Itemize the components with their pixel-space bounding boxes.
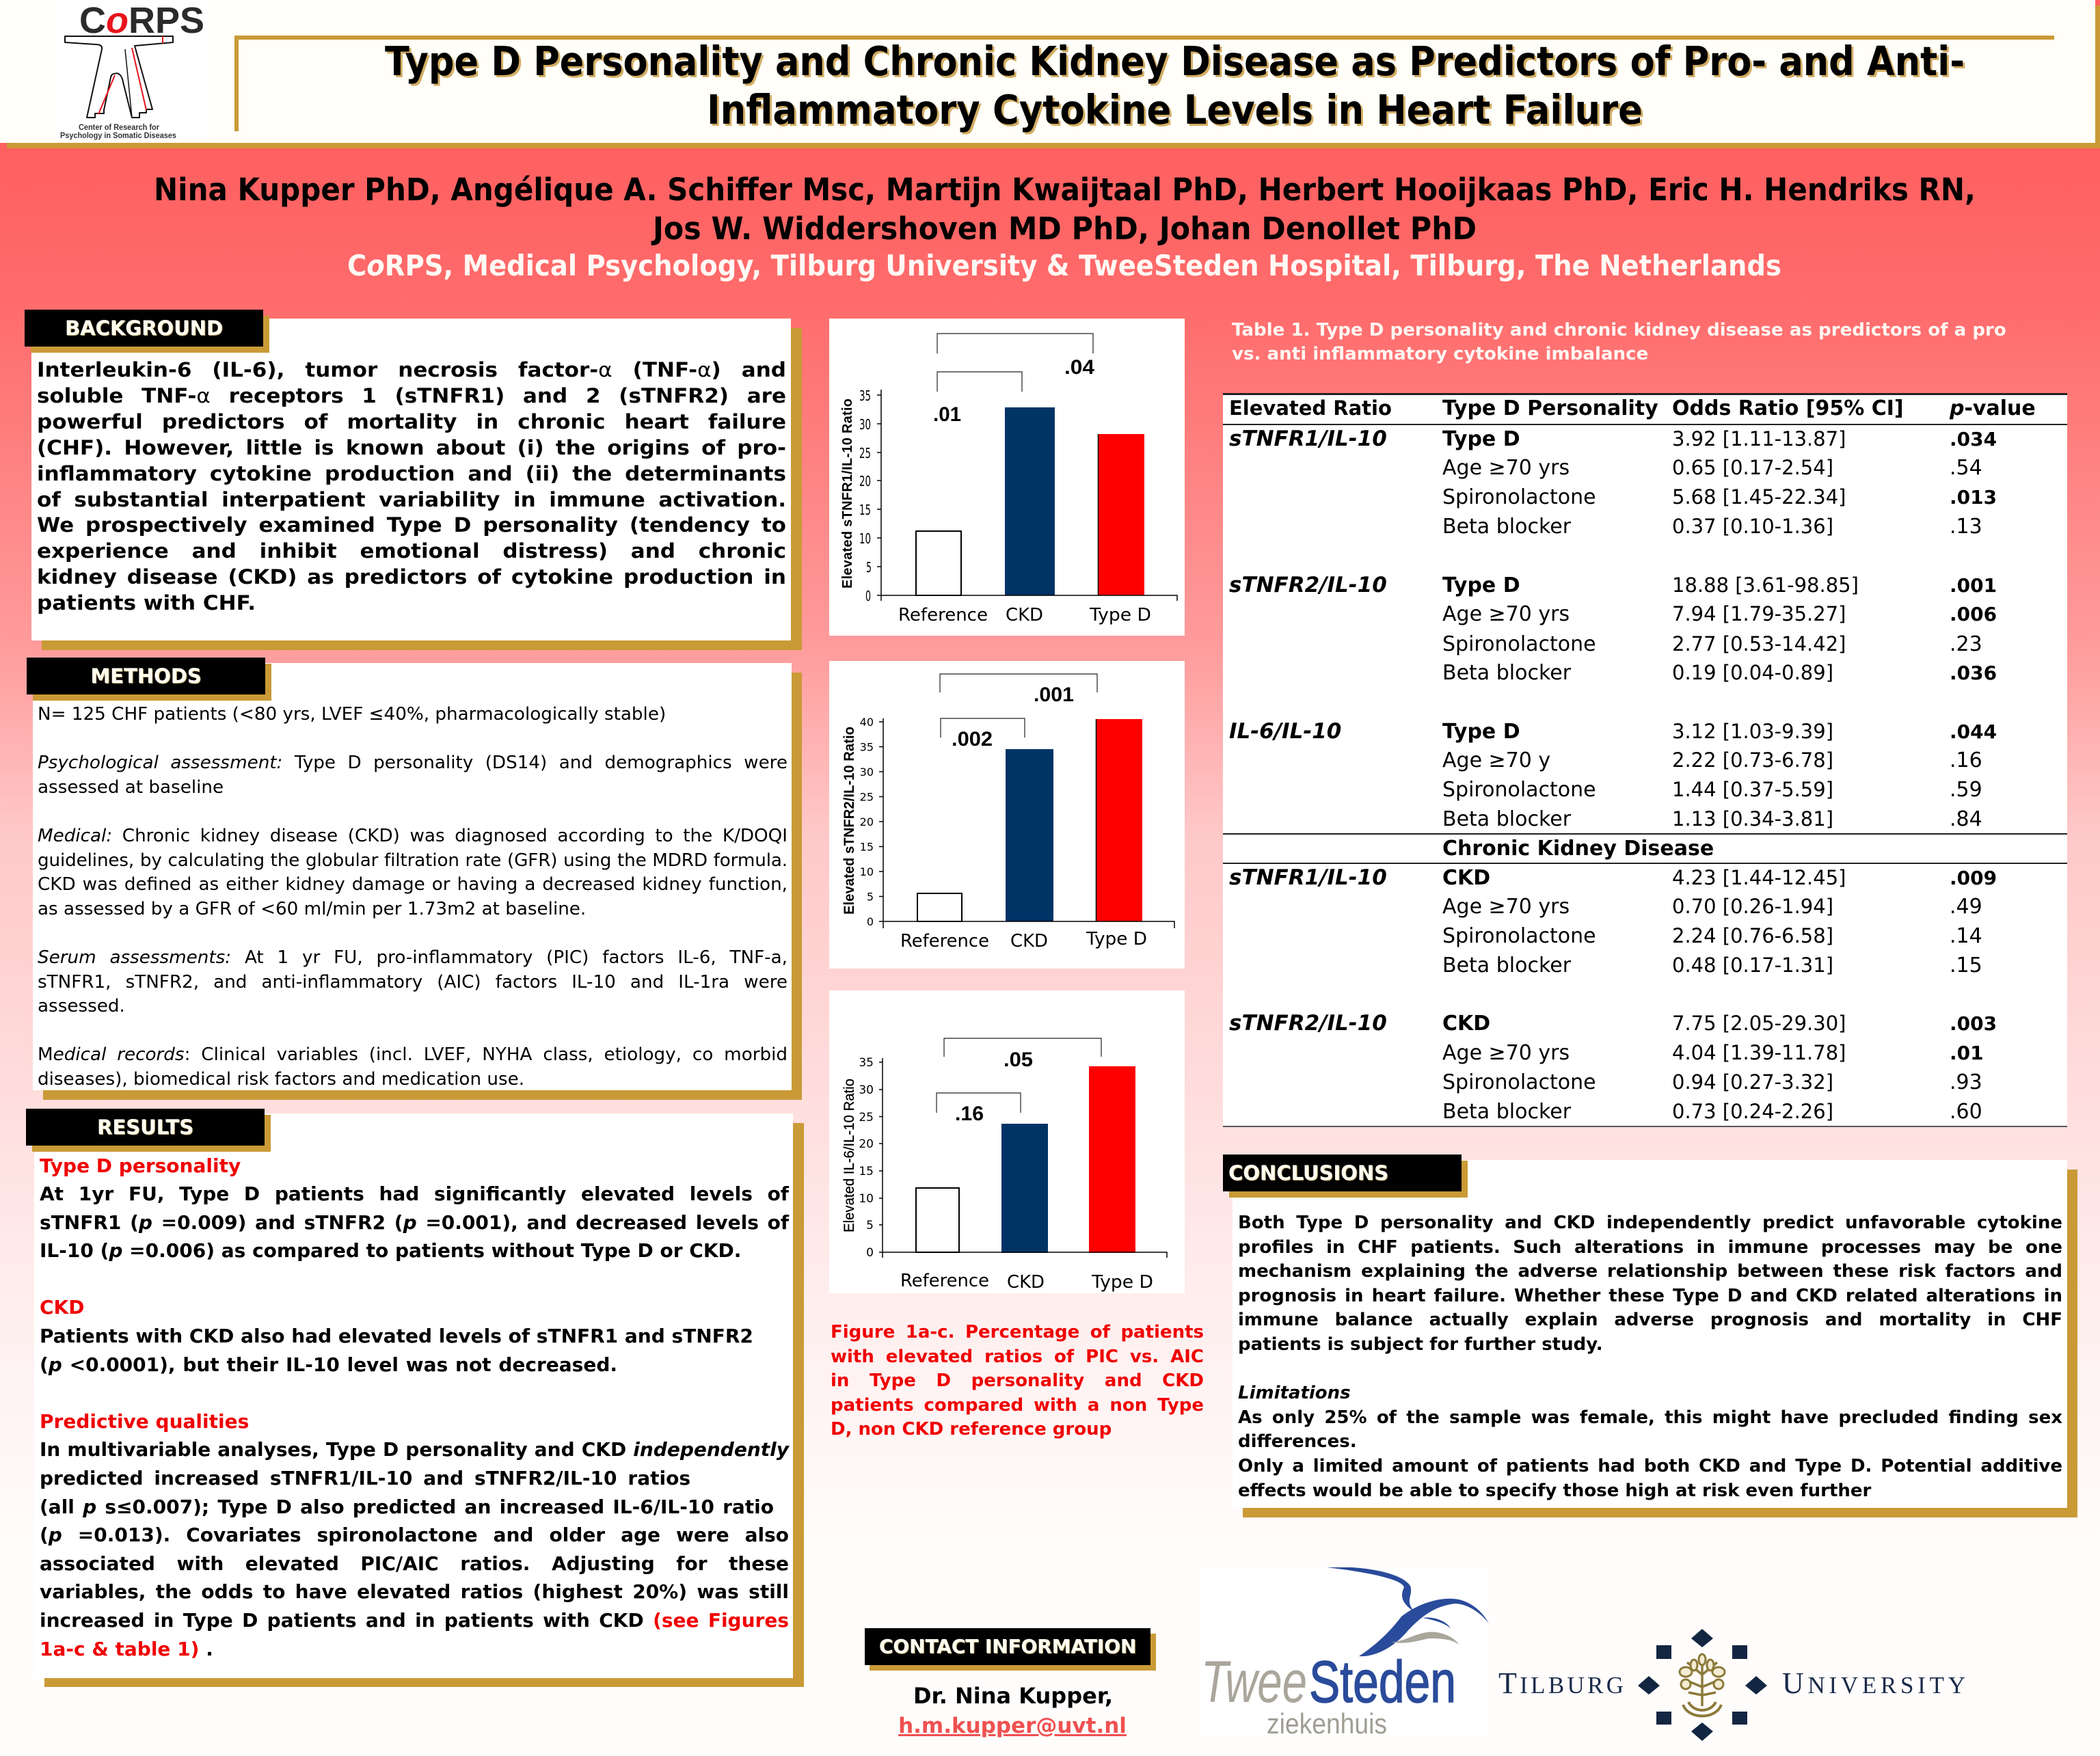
y axis labels [859, 388, 872, 604]
title [385, 38, 1965, 133]
rows: type D: .013 [1950, 486, 1997, 509]
text: results: Type D personality [40, 1154, 241, 1177]
wordmark: TILBURG [1498, 1666, 1624, 1700]
table header row: Odds Ratio [95% CI] [1672, 396, 1904, 420]
rows: type D: Type D [1442, 720, 1520, 744]
y axis labels: 20 [859, 1137, 874, 1151]
bar chart: sTNFR1/IL-10 [829, 319, 1185, 636]
authors and affiliation [154, 172, 1976, 282]
text: background: experience and inhibit emotional distress) and chronic [37, 539, 786, 563]
rows: chronic kidney disease: 0.94 [0.27-3.32] [1672, 1070, 1833, 1094]
text: results: variables, the odds to have elevated ratios (highest 20%) was still [40, 1580, 789, 1603]
rows: chronic kidney disease [1229, 837, 1997, 1124]
text: results: associated with elevated PIC/AIC ratios. Adjusting for these [40, 1552, 789, 1575]
significance brackets [937, 1038, 1101, 1125]
text: results: sTNFR1 (p =0.009) and sTNFR2 (p =0.001), and decreased levels of [40, 1211, 789, 1234]
text: conclusions: differences. [1238, 1431, 1357, 1452]
rows: chronic kidney disease: Spironolactone [1442, 1070, 1596, 1094]
bars [917, 719, 1142, 921]
text: results: CKD [40, 1296, 85, 1319]
text: conclusions: Limitations [1238, 1383, 1351, 1403]
rows: type D: .044 [1950, 720, 1997, 743]
rows: type D: sTNFR1/IL-10 [1229, 427, 1387, 451]
significance brackets: .05 [1004, 1049, 1033, 1071]
y axis labels: 30 [859, 416, 871, 433]
y axis labels: 20 [860, 815, 874, 828]
rows: type D: Spironolactone [1442, 632, 1596, 656]
text: conclusions: patients is subject for further study. [1238, 1334, 1603, 1355]
heading: methods [27, 658, 271, 701]
x axis labels: Type D [1089, 605, 1151, 625]
text: background: of substantial interpatient variability in immune activation. [37, 488, 786, 511]
table caption: Table 1. Type D personality and chronic kidney disease as predictors of a pro [1232, 320, 2006, 340]
panel: conclusions [1223, 1154, 2077, 1517]
text: results: (p =0.013). Covariates spironolactone and older age were also [40, 1524, 789, 1546]
y axis labels: 30 [859, 1083, 874, 1097]
rows: type D: 0.37 [0.10-1.36] [1672, 515, 1833, 538]
text: conclusions: immune balance actually explain adverse prognosis and mortality in CHF [1238, 1310, 2062, 1330]
rows: chronic kidney disease: .60 [1950, 1100, 1982, 1124]
rows: chronic kidney disease: .49 [1950, 895, 1982, 919]
rows: type D: .001 [1950, 574, 1997, 597]
table header row: Elevated Ratio [1229, 396, 1392, 420]
rows: type D: Beta blocker [1442, 515, 1571, 539]
panel: background [25, 310, 802, 650]
text: background: inflammatory cytokine production and (ii) the determinants [37, 462, 786, 485]
significance brackets [940, 674, 1097, 751]
text: conclusions: As only 25% of the sample was female, this might have precluded finding sex [1238, 1407, 2062, 1428]
rows: chronic kidney disease: 0.70 [0.26-1.94] [1672, 895, 1833, 918]
y axis labels: 0 [865, 588, 871, 604]
y axis labels: 35 [859, 1056, 874, 1070]
panel: contact information [865, 1628, 1156, 1738]
rows: chronic kidney disease: Age ≥70 yrs [1442, 895, 1570, 919]
y axis title: Elevated sTNFR1/IL-10 Ratio [840, 399, 855, 589]
x axis labels: CKD [1010, 931, 1048, 951]
heading: contact: CONTACT INFORMATION [879, 1635, 1136, 1658]
x axis labels [900, 1271, 1153, 1293]
rows: type D: Age ≥70 yrs [1442, 602, 1570, 626]
heading: results: RESULTS [97, 1116, 193, 1139]
y axis labels: 15 [859, 1165, 874, 1178]
rows: type D: Type D [1442, 427, 1520, 451]
rows: type D: 2.22 [0.73-6.78] [1672, 748, 1833, 772]
bars [916, 1066, 1135, 1253]
text: results [40, 1154, 790, 1660]
x axis labels: Type D [1086, 929, 1147, 949]
rows: type D: 18.88 [3.61-98.85] [1672, 573, 1859, 597]
heading: contact [865, 1628, 1156, 1671]
y axis labels [859, 1056, 874, 1260]
x axis labels: CKD [1007, 1272, 1045, 1293]
logo: CoRPS: Center of Research for [79, 122, 159, 132]
y axis labels: 0 [867, 915, 874, 928]
rows: type D: 5.68 [1.45-22.34] [1672, 485, 1846, 509]
text: background: Interleukin-6 (IL-6), tumor necrosis factor-α (TNF-α) and [37, 358, 786, 381]
text: background: patients with CHF. [37, 591, 256, 614]
rows: chronic kidney disease: sTNFR1/IL-10 [1229, 865, 1387, 890]
text: methods: assessed. [38, 996, 125, 1016]
y axis labels: 25 [860, 790, 874, 804]
emblem [1638, 1629, 1767, 1741]
rows: chronic kidney disease: Spironolactone [1442, 924, 1596, 948]
heading: conclusions: CONCLUSIONS [1228, 1161, 1388, 1185]
y axis labels: 10 [859, 1192, 874, 1206]
text: methods: Psychological assessment: Type D personality (DS14) and demographics were [38, 753, 788, 773]
table caption: vs. anti inflammatory cytokine imbalance [1232, 343, 1648, 364]
wordmark: Twee [1201, 1649, 1307, 1715]
affiliation: CoRPS, Medical Psychology, Tilburg University & TweeSteden Hospital, Tilburg, The Netherlands [347, 249, 1781, 282]
y axis labels: 25 [859, 1111, 874, 1124]
text: background: We prospectively examined Type D personality (tendency to [37, 513, 786, 537]
text: results: predicted increased sTNFR1/IL-10 and sTNFR2/IL-10 ratios [40, 1467, 690, 1489]
rows: chronic kidney disease: Beta blocker [1442, 954, 1571, 977]
rows: type D: 0.65 [0.17-2.54] [1672, 456, 1833, 479]
rows: type D: 3.12 [1.03-9.39] [1672, 720, 1833, 743]
figure caption: Figure 1a-c. Percentage of patients [831, 1322, 1204, 1342]
significance brackets: .001 [1034, 684, 1074, 706]
y axis labels: 10 [859, 530, 871, 547]
wordmark [1498, 1666, 1965, 1700]
rows: chronic kidney disease: 7.75 [2.05-29.30] [1672, 1012, 1846, 1035]
rows: chronic kidney disease: 4.04 [1.39-11.78] [1672, 1041, 1846, 1064]
text: results: Patients with CKD also had elevated levels of sTNFR1 and sTNFR2 [40, 1325, 753, 1347]
rows: type D: Spironolactone [1442, 778, 1596, 802]
text: methods: diseases), biomedical risk factors and medication use. [38, 1069, 524, 1090]
table header row: p-value [1950, 396, 2036, 420]
figure caption [831, 1322, 1204, 1440]
text: background: powerful predictors of mortality in chronic heart failure [37, 410, 786, 433]
text: methods: as assessed by a GFR of <60 ml/min per 1.73m2 at baseline. [38, 899, 586, 919]
rows: chronic kidney disease: .009 [1950, 867, 1997, 889]
title frame [237, 38, 2054, 131]
wordmark: UNIVERSITY [1782, 1666, 1965, 1700]
rows: type D: .84 [1950, 807, 1982, 831]
rows: chronic kidney disease: .01 [1950, 1042, 1984, 1064]
text: conclusions: profiles in CHF patients. Such alterations in immune processes may be one [1238, 1237, 2062, 1258]
y axis labels: 20 [859, 473, 871, 489]
heading: results [26, 1109, 271, 1152]
rows: type D: Beta blocker [1442, 807, 1571, 831]
text: background: (CHF). However, little is known about (i) the origins of pro- [37, 436, 786, 459]
rows: type D: Type D [1442, 573, 1520, 597]
heading: conclusions [1223, 1154, 1468, 1198]
rows: chronic kidney disease: .14 [1950, 924, 1982, 948]
text: conclusions: effects would be able to specify those high at risk even further [1238, 1481, 1871, 1501]
rows: type D: .23 [1950, 632, 1982, 656]
text: methods [38, 704, 788, 1090]
y axis labels: 0 [866, 1246, 874, 1260]
bar chart: IL-6/IL-10 [829, 990, 1185, 1293]
title: Inflammatory Cytokine Levels in Heart Failure [707, 86, 1643, 133]
heading: background [25, 310, 269, 353]
rows: type D: 2.77 [0.53-14.42] [1672, 632, 1846, 656]
text: results: (all p s≤0.007); Type D also predicted an increased IL-6/IL-10 ratio [40, 1496, 774, 1518]
text: results: At 1yr FU, Type D patients had significantly elevated levels of [40, 1183, 789, 1205]
rows: type D [1229, 427, 1997, 831]
rows: type D: Age ≥70 y [1442, 748, 1550, 772]
rows: type D: IL-6/IL-10 [1229, 719, 1341, 744]
rows: type D: 7.94 [1.79-35.27] [1672, 602, 1846, 625]
y axis labels: 25 [859, 445, 871, 461]
table 1 [1223, 393, 2067, 1126]
text: conclusions: Both Type D personality and CKD independently predict unfavorable cytokine [1238, 1213, 2062, 1233]
x axis labels: Reference [900, 931, 989, 951]
text: methods: Medical records: Clinical variables (incl. LVEF, NYHA class, etiology, co morbid [38, 1044, 788, 1065]
y axis labels: 30 [860, 766, 874, 779]
rows: type D: 1.44 [0.37-5.59] [1672, 778, 1833, 801]
panel: results [26, 1109, 804, 1687]
text: methods: Serum assessments: At 1 yr FU, pro-inflammatory (PIC) factors IL-6, TNF-a, [38, 947, 788, 968]
rows: type D: sTNFR2/IL-10 [1229, 573, 1387, 597]
text: background: soluble TNF-α receptors 1 (sTNFR1) and 2 (sTNFR2) are [37, 384, 786, 407]
rows: chronic kidney disease: 4.23 [1.44-12.45] [1672, 866, 1846, 889]
authors: Jos W. Widdershoven MD PhD, Johan Denollet PhD [651, 211, 1477, 247]
significance brackets: .002 [952, 728, 993, 751]
text: conclusions: Only a limited amount of patients had both CKD and Type D. Potential additive [1238, 1456, 2062, 1476]
logo: CoRPS [57, 0, 208, 140]
wordmark [1201, 1649, 1456, 1740]
table header row: Type D Personality [1442, 396, 1658, 420]
x axis labels: CKD [1006, 605, 1043, 625]
text: results: IL-10 (p =0.006) as compared to patients without Type D or CKD. [40, 1239, 741, 1262]
y axis labels: 15 [859, 502, 871, 518]
rows: chronic kidney disease: .93 [1950, 1070, 1982, 1094]
logo: Tilburg University [1498, 1629, 1965, 1741]
logo: CoRPS: Psychology in Somatic Diseases [60, 131, 176, 140]
text: background: kidney disease (CKD) as predictors of cytokine production in [37, 565, 786, 589]
rows: type D: .54 [1950, 456, 1982, 480]
rows: type D: 1.13 [0.34-3.81] [1672, 807, 1833, 830]
rows: chronic kidney disease: CKD [1442, 1012, 1490, 1036]
text: conclusions [1238, 1213, 2062, 1501]
table header row [1229, 396, 2036, 420]
text: methods: Medical: Chronic kidney disease (CKD) was diagnosed according to the K/DOQI [38, 826, 788, 846]
figure caption: D, non CKD reference group [831, 1419, 1112, 1440]
rows: chronic kidney disease: 0.73 [0.24-2.26] [1672, 1100, 1833, 1123]
text: methods: CKD was defined as either kidney damage or having a decreased kidney function, [38, 874, 788, 895]
y axis title: Elevated sTNFR2/IL-10 Ratio [842, 727, 857, 915]
rows: type D: Age ≥70 yrs [1442, 456, 1570, 480]
panel: methods [27, 658, 802, 1100]
rows: chronic kidney disease: 0.48 [0.17-1.31] [1672, 954, 1833, 977]
bird swoosh [1327, 1567, 1489, 1656]
significance brackets [933, 334, 1094, 426]
authors [154, 172, 1976, 247]
contact email: h.m.kupper@uvt.nl [898, 1714, 1127, 1738]
heading: methods: METHODS [90, 664, 202, 688]
text: methods: guidelines, by calculating the globular filtration rate (GFR) using the MDRD formula. [38, 850, 788, 871]
rows: type D: Spironolactone [1442, 485, 1596, 509]
text: results: increased in Type D patients and in patients with CKD (see Figures [40, 1609, 789, 1632]
rows: type D: .006 [1950, 603, 1997, 625]
text: results: 1a-c & table 1) . [40, 1638, 213, 1660]
text: results: (p <0.0001), but their IL-10 level was not decreased. [40, 1353, 617, 1376]
rows: chronic kidney disease: 2.24 [0.76-6.58] [1672, 924, 1833, 947]
text: conclusions: mechanism explaining the adverse relationship between these risk factors and [1238, 1261, 2062, 1282]
significance brackets: .01 [933, 403, 961, 426]
y axis labels: 15 [860, 841, 874, 853]
bars [916, 407, 1144, 595]
text: conclusions: prognosis in heart failure. Whether these Type D and CKD related alterations in [1238, 1286, 2062, 1306]
x axis labels: Type D [1091, 1272, 1153, 1293]
heading: background: BACKGROUND [65, 316, 223, 340]
significance brackets: .16 [955, 1103, 984, 1125]
bar chart: sTNFR2/IL-10 [829, 661, 1185, 969]
x axis labels [898, 605, 1151, 625]
table caption [1232, 320, 2006, 364]
logo: CoRPS: CoRPS [79, 0, 204, 41]
header band [0, 0, 2100, 148]
y axis labels: 5 [866, 1219, 874, 1232]
rows: chronic kidney disease: sTNFR2/IL-10 [1229, 1011, 1387, 1036]
y axis labels: 5 [867, 890, 874, 904]
rows: chronic kidney disease: .003 [1950, 1012, 1997, 1035]
rows: chronic kidney disease: .15 [1950, 954, 1982, 977]
y axis labels: 5 [866, 559, 872, 576]
text: results: Predictive qualities [40, 1410, 249, 1433]
text: methods: assessed at baseline [38, 777, 224, 798]
rows: chronic kidney disease: Age ≥70 yrs [1442, 1041, 1570, 1065]
x axis labels [900, 929, 1147, 951]
figure caption: patients compared with a non Type [831, 1395, 1204, 1416]
text: results: In multivariable analyses, Type D personality and CKD independently [40, 1438, 789, 1461]
rows: type D: 0.19 [0.04-0.89] [1672, 661, 1833, 684]
y axis labels: 35 [859, 388, 871, 404]
contact name: Dr. Nina Kupper, [913, 1683, 1113, 1709]
rows: type D: .16 [1950, 748, 1982, 772]
rows: type D: .036 [1950, 662, 1997, 684]
x axis labels: Reference [898, 605, 988, 625]
significance brackets: .04 [1064, 356, 1094, 379]
y axis labels: 40 [860, 716, 874, 729]
text: methods: N= 125 CHF patients (<80 yrs, LVEF ≤40%, pharmacologically stable) [38, 704, 666, 725]
rows: type D: .59 [1950, 778, 1982, 802]
rows: type D: .13 [1950, 515, 1982, 539]
text: methods: sTNFR1, sTNFR2, and anti-inflammatory (AIC) factors IL-10 and IL-1ra were [38, 972, 788, 992]
rows: chronic kidney disease: Beta blocker [1442, 1100, 1571, 1124]
rows: type D: .034 [1950, 428, 1997, 450]
y axis title: Elevated IL-6/IL-10 Ratio [842, 1079, 857, 1232]
rows: chronic kidney disease: Chronic Kidney Disease [1442, 837, 1714, 861]
rows: type D: Beta blocker [1442, 661, 1571, 685]
rows: type D: 3.92 [1.11-13.87] [1672, 427, 1846, 450]
rows: chronic kidney disease: CKD [1442, 866, 1490, 890]
text: background [37, 358, 786, 614]
figure caption: with elevated ratios of PIC vs. AIC [831, 1347, 1204, 1367]
y axis labels: 10 [860, 865, 874, 878]
figure caption: in Type D personality and CKD [831, 1370, 1204, 1391]
y axis labels: 35 [860, 741, 874, 753]
logo: TweeSteden ziekenhuis [1201, 1567, 1489, 1735]
x axis labels: Reference [900, 1271, 989, 1291]
y axis labels [860, 716, 874, 928]
